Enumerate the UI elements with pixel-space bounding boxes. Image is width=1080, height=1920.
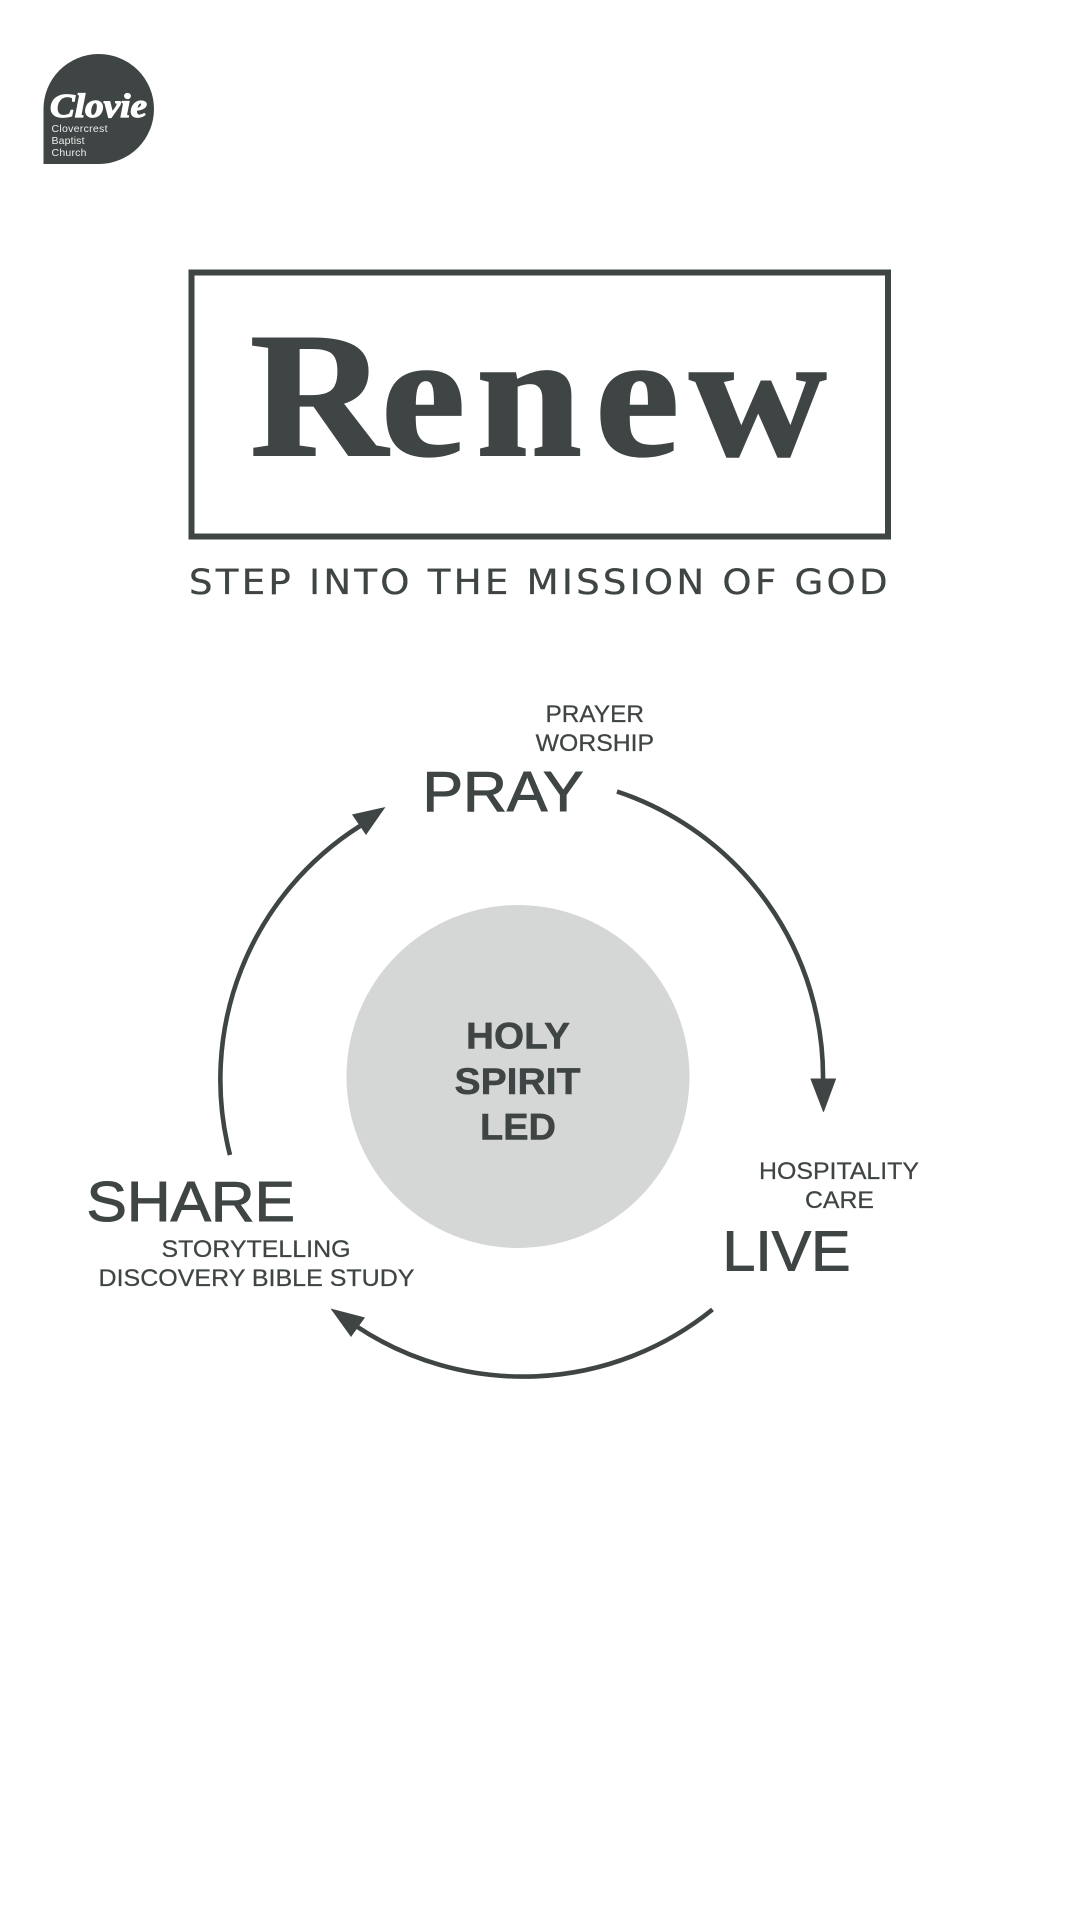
step: Pray (422, 701, 654, 824)
logo church name: Church (52, 147, 87, 159)
Share details: STORYTELLING (162, 1236, 350, 1263)
logo church name: Clovercrest (52, 123, 108, 135)
Live details (759, 1158, 919, 1214)
logo: Clovie badge (43, 54, 154, 164)
subtitle: STEP INTO THE MISSION OF GOD (189, 562, 888, 603)
Pray details (536, 701, 654, 757)
Live heading: LIVE (722, 1220, 850, 1284)
step: Share (86, 1170, 414, 1292)
center label (454, 1016, 581, 1148)
arrow: Pray to Live (617, 792, 836, 1112)
center label: HOLY (466, 1016, 570, 1056)
Share heading: SHARE (86, 1170, 295, 1234)
Share details (98, 1236, 414, 1292)
Share details: DISCOVERY BIBLE STUDY (98, 1265, 414, 1292)
logo wordmark: Clovie (50, 88, 147, 125)
Pray details: PRAYER (546, 701, 644, 728)
arrow: Share to Pray (220, 807, 386, 1155)
Pray heading: PRAY (422, 760, 584, 824)
center circle: Holy Spirit Led (346, 905, 690, 1248)
step: Live (722, 1158, 919, 1284)
Pray details: WORSHIP (536, 730, 654, 757)
title: Renew: Renew (250, 297, 827, 494)
Live details: HOSPITALITY (759, 1158, 919, 1185)
logo church name (52, 123, 108, 159)
title frame (192, 272, 888, 536)
Live details: CARE (805, 1187, 874, 1214)
logo church name: Baptist (52, 135, 85, 147)
arrow: Live to Share (330, 1308, 712, 1377)
center label: SPIRIT (454, 1061, 581, 1102)
center label: LED (480, 1106, 556, 1148)
